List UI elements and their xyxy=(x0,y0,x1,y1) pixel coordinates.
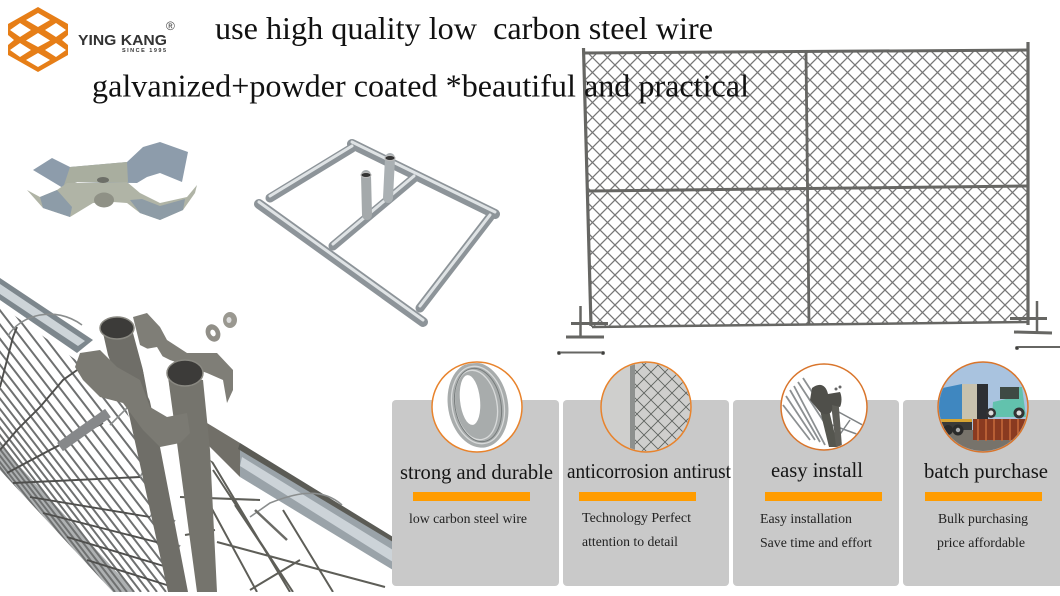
top rail, left xyxy=(0,278,93,353)
fence panel illustration xyxy=(558,42,1060,354)
upper jaw xyxy=(33,142,188,188)
orange bar xyxy=(765,492,882,501)
icon: wire coil xyxy=(432,357,522,453)
description xyxy=(937,512,1028,551)
bolt xyxy=(94,192,114,208)
orange bar xyxy=(579,492,696,501)
top rail, right xyxy=(203,423,393,570)
panel: batch purchase xyxy=(903,362,1060,586)
description: Bulk purchasing xyxy=(938,512,1028,527)
card background xyxy=(903,400,1060,586)
since 1995: SINCE 1995 xyxy=(122,48,166,54)
base frame tubes xyxy=(259,144,495,322)
bolt xyxy=(60,413,108,447)
heading line 2: galvanized+powder coated *beautiful and practical xyxy=(92,68,749,104)
orange bar xyxy=(925,492,1042,501)
orange bar xyxy=(413,492,530,501)
tight mesh, left xyxy=(0,308,167,592)
tie wires xyxy=(8,314,342,567)
card background xyxy=(563,400,729,586)
heading line 1: use high quality low carbon steel wire xyxy=(215,11,713,46)
panel: strong and durable xyxy=(392,357,559,586)
registered mark: ® xyxy=(166,19,175,33)
right foot xyxy=(1010,301,1060,350)
icon: mesh close-up xyxy=(601,360,694,455)
pipe mouths xyxy=(100,317,134,339)
description: attention to detail xyxy=(582,535,678,550)
panel: easy install xyxy=(733,364,899,586)
description xyxy=(582,511,691,550)
upright sockets xyxy=(366,175,367,215)
description xyxy=(760,512,872,551)
description: Easy installation xyxy=(760,512,852,527)
heading: strong and durable xyxy=(400,460,553,484)
heading: easy install xyxy=(771,458,863,482)
lower jaw xyxy=(27,182,197,220)
clamp back plate xyxy=(133,313,233,403)
panel: anticorrosion antirust xyxy=(563,360,731,586)
fence joint close-up illustration xyxy=(0,278,393,592)
washer and nut xyxy=(203,312,237,344)
icon: welded fence foot base xyxy=(259,142,495,322)
description: Technology Perfect xyxy=(582,511,691,526)
icon: clamp close-up xyxy=(781,364,868,450)
frame tubes xyxy=(584,42,1028,327)
open mesh, right xyxy=(180,450,385,592)
icon: fence clamp photo xyxy=(27,142,197,220)
heading: anticorrosion antirust xyxy=(567,459,731,483)
description: price affordable xyxy=(937,536,1025,551)
card background xyxy=(392,400,559,586)
clamp front plate xyxy=(75,350,190,447)
grey selvedge band xyxy=(0,445,135,592)
description: low carbon steel wire xyxy=(409,512,527,527)
icon: loading container photo xyxy=(935,362,1031,455)
card background xyxy=(733,400,899,586)
clamp slot xyxy=(140,347,172,415)
end post A xyxy=(103,333,188,592)
description: Save time and effort xyxy=(760,536,872,551)
icon: orange mesh hexagon xyxy=(8,7,68,72)
end post B xyxy=(168,377,217,592)
logo: Ying Kang xyxy=(8,7,175,72)
left foot xyxy=(558,306,608,354)
chain link mesh xyxy=(585,50,1027,327)
brand name: YING KANG xyxy=(78,32,167,49)
heading: batch purchase xyxy=(924,459,1048,483)
